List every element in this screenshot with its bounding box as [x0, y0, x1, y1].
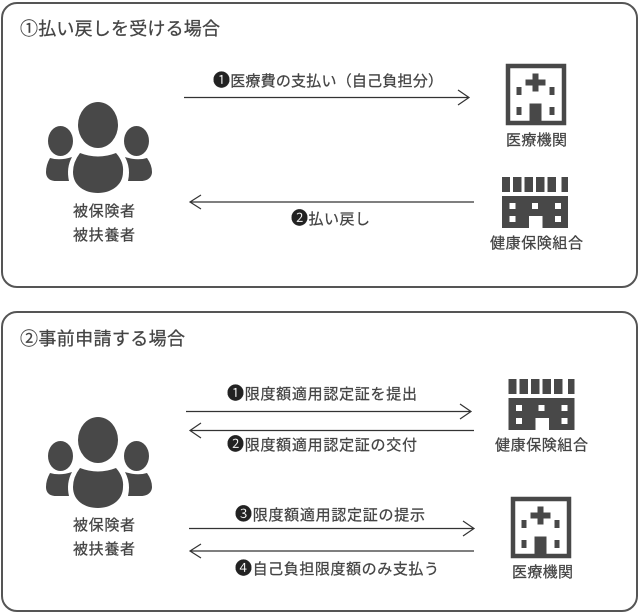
- label: insured persons: 被保険者: [73, 517, 135, 534]
- label: health insurance society: 健康保険組合: [495, 437, 588, 454]
- heading: case 2: ②事前申請する場合: [20, 329, 185, 349]
- panel: reimbursement case: [2, 3, 637, 287]
- icon: hospital: [513, 499, 569, 556]
- label: dependents: 被扶養者: [73, 227, 135, 244]
- label: step 4 pay: ❹自己負担限度額のみ支払う: [235, 559, 439, 578]
- icon: health insurance society: [508, 379, 574, 430]
- arrow: submit certificate: [186, 404, 471, 419]
- arrow: present certificate: [189, 521, 474, 536]
- label: step 1 submit: ❶限度額適用認定証を提出: [227, 384, 417, 403]
- icon: insured people: [46, 102, 152, 193]
- label: step 3 present: ❸限度額適用認定証の提示: [235, 505, 425, 524]
- icon: hospital: [508, 66, 564, 123]
- label: insured persons: 被保険者: [73, 203, 135, 220]
- arrow: payment to hospital: [184, 90, 469, 105]
- label: dependents: 被扶養者: [73, 541, 135, 558]
- label: medical institution: 医療機関: [512, 564, 573, 581]
- label: health insurance society: 健康保険組合: [490, 235, 583, 252]
- panel: advance application case: [2, 312, 637, 611]
- arrow: issue certificate: [190, 423, 474, 438]
- label: medical institution: 医療機関: [506, 132, 567, 149]
- label: step 2 refund: ❷払い戻し: [291, 209, 370, 228]
- arrow: pay up to limit: [190, 544, 474, 558]
- arrow: refund to insured: [190, 195, 474, 209]
- icon: health insurance society: [502, 177, 568, 228]
- icon: insured people: [46, 417, 152, 508]
- heading: case 1: ①払い戻しを受ける場合: [20, 19, 220, 39]
- label: step 1 payment: ❶医療費の支払い（自己負担分）: [213, 71, 443, 90]
- label: step 2 issue: ❷限度額適用認定証の交付: [227, 435, 417, 454]
